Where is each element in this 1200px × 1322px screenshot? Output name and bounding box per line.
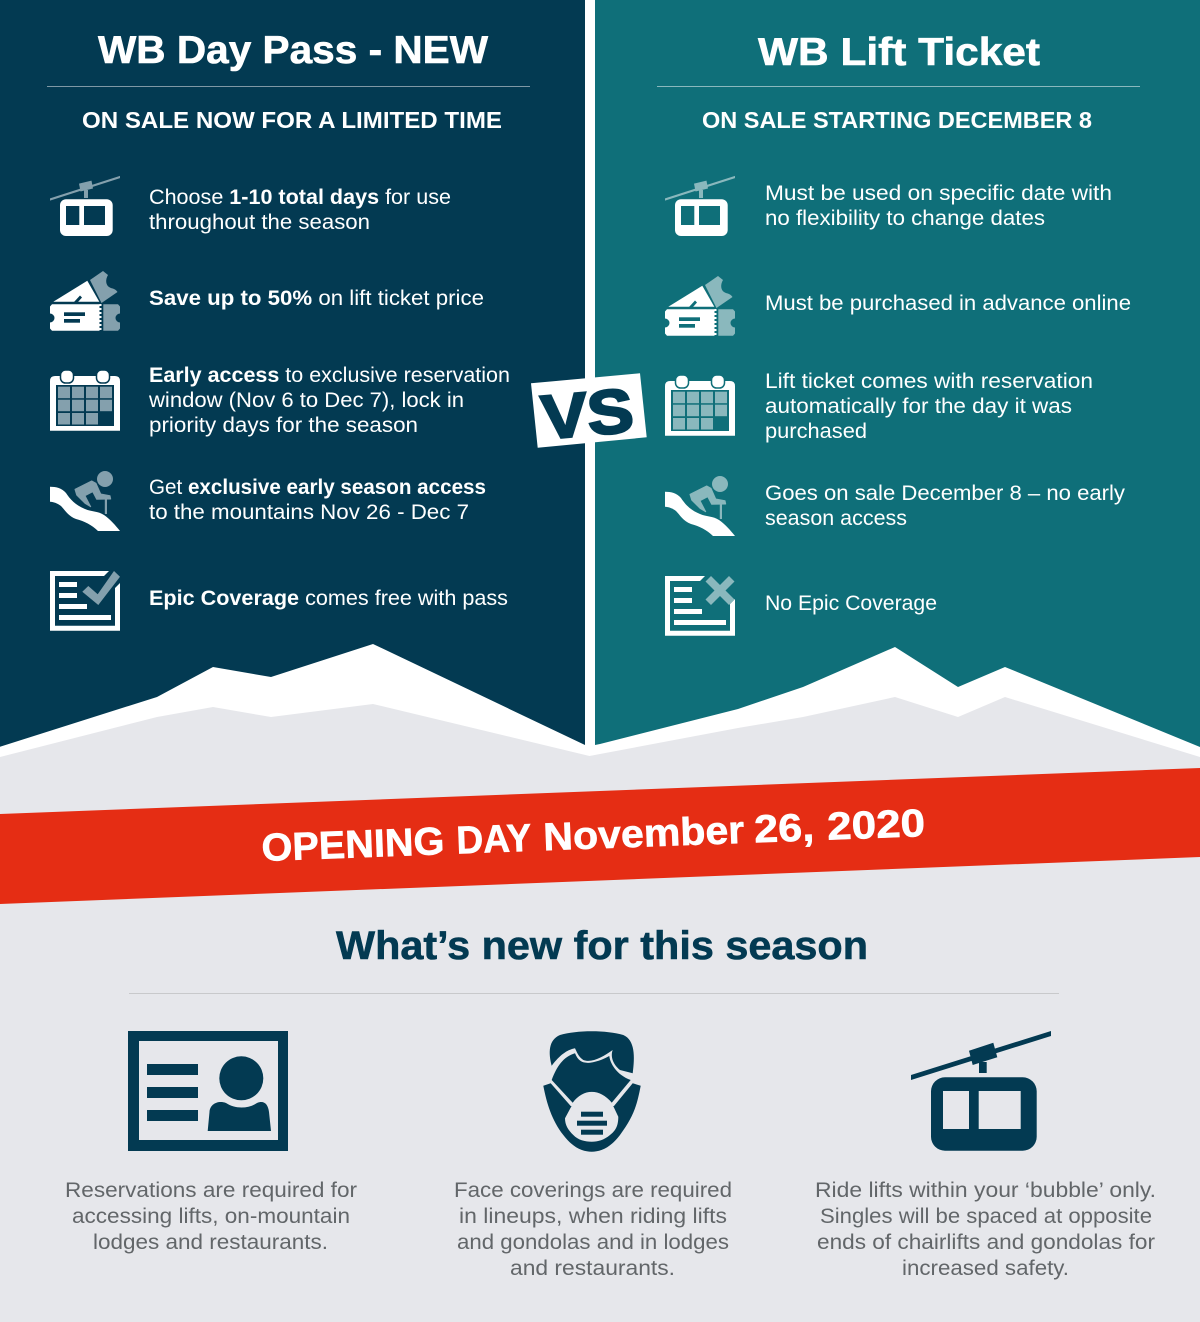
text: purchased in advance: Must be purchased in advance online bbox=[765, 292, 1131, 315]
text: early access: priority days for the season bbox=[149, 414, 418, 437]
heading: what's new: What’s new for this season bbox=[336, 924, 868, 968]
icon: face mask bbox=[543, 1031, 641, 1152]
text: reservations: lodges and restaurants. bbox=[93, 1230, 328, 1254]
text: reservation: purchased bbox=[765, 420, 867, 443]
text: no early season: season access bbox=[765, 507, 907, 530]
subheading: on sale now: ON SALE NOW FOR A LIMITED TIME bbox=[82, 107, 502, 133]
text: ride lifts: increased safety. bbox=[902, 1256, 1069, 1280]
icon: tickets bbox=[50, 271, 120, 331]
icon: tickets bbox=[665, 276, 735, 336]
icon: cross document bbox=[665, 576, 735, 636]
text: save: Save up to 50% on lift ticket price bbox=[149, 287, 484, 310]
banner: opening day: 2020 bbox=[826, 802, 926, 849]
text: early access: Early access to exclusive reservation bbox=[149, 364, 510, 387]
mountains: white snow bbox=[0, 644, 1200, 772]
text: face coverings: and restaurants. bbox=[510, 1256, 675, 1280]
text: reservations: Reservations are required for bbox=[65, 1178, 357, 1202]
text: ride lifts: ends of chairlifts and gondolas for bbox=[817, 1230, 1155, 1254]
text: epic coverage: Epic Coverage comes free with pass bbox=[149, 587, 508, 610]
heading: WB Lift Ticket: WB Lift Ticket bbox=[758, 31, 1040, 74]
text: early season bbox=[149, 476, 486, 524]
text: reservations bbox=[65, 1178, 357, 1254]
heading: WB Day Pass: WB Day Pass - NEW bbox=[98, 29, 488, 72]
text: face coverings: in lineups, when riding lifts bbox=[459, 1204, 727, 1228]
text: no early season bbox=[765, 482, 1126, 530]
page divider bbox=[0, 0, 1200, 772]
icon: checklist bbox=[50, 571, 120, 631]
panel: WB Lift Ticket bbox=[595, 0, 1200, 760]
text: face coverings: Face coverings are required bbox=[454, 1178, 732, 1202]
VS badge: VS bbox=[539, 376, 636, 453]
text: specific date: no flexibility to change dates bbox=[765, 207, 1045, 230]
icon: gondola bbox=[665, 176, 735, 236]
icon: reservation card bbox=[128, 1031, 288, 1151]
text: specific date: Must be used on specific date with bbox=[765, 182, 1112, 205]
text: reservation bbox=[765, 370, 1093, 443]
text: choose days: throughout the season bbox=[149, 211, 370, 234]
text: ride lifts: Ride lifts within your ‘bubble’ only. bbox=[815, 1178, 1156, 1202]
text: no epic coverage: No Epic Coverage bbox=[765, 592, 937, 615]
text: reservation: Lift ticket comes with reservation bbox=[765, 370, 1093, 393]
text: early access bbox=[148, 364, 510, 437]
text: reservation: automatically for the day it was bbox=[765, 395, 1072, 418]
text: specific date bbox=[765, 182, 1112, 230]
icon: calendar bbox=[50, 370, 120, 431]
text: reservations: accessing lifts, on-mountain bbox=[72, 1204, 350, 1228]
text: ride lifts bbox=[815, 1178, 1156, 1280]
banner: opening day: DAY bbox=[456, 817, 532, 863]
icon: skier bbox=[50, 471, 120, 531]
subheading: on sale starting: ON SALE STARTING DECEMBER 8 bbox=[702, 107, 1092, 133]
banner: opening day bbox=[0, 768, 1200, 904]
icon: gondola bbox=[50, 176, 120, 236]
text: face coverings: and gondolas and in lodges bbox=[457, 1230, 729, 1254]
text: ride lifts: Singles will be spaced at opposite bbox=[820, 1204, 1152, 1228]
text: early season: to the mountains Nov 26 - Dec 7 bbox=[149, 501, 469, 524]
banner: opening day: November bbox=[543, 809, 745, 859]
icon: calendar bbox=[665, 375, 735, 436]
text: no early season: Goes on sale December 8 – no early bbox=[765, 482, 1126, 505]
text: early season: Get exclusive early season access bbox=[149, 476, 486, 499]
mountains: grey foreground bbox=[0, 697, 1200, 1322]
panel: WB Day Pass bbox=[0, 0, 585, 760]
banner: opening day: OPENING bbox=[261, 820, 445, 870]
text: face coverings bbox=[454, 1178, 732, 1280]
icon: skier bbox=[665, 476, 735, 536]
text: early access: window (Nov 6 to Dec 7), lock in bbox=[148, 389, 464, 412]
text: choose days: Choose 1-10 total days for use bbox=[149, 186, 451, 209]
icon: large gondola bbox=[911, 1031, 1051, 1151]
text: choose days bbox=[149, 186, 451, 234]
banner: opening day: 26, bbox=[753, 806, 815, 851]
